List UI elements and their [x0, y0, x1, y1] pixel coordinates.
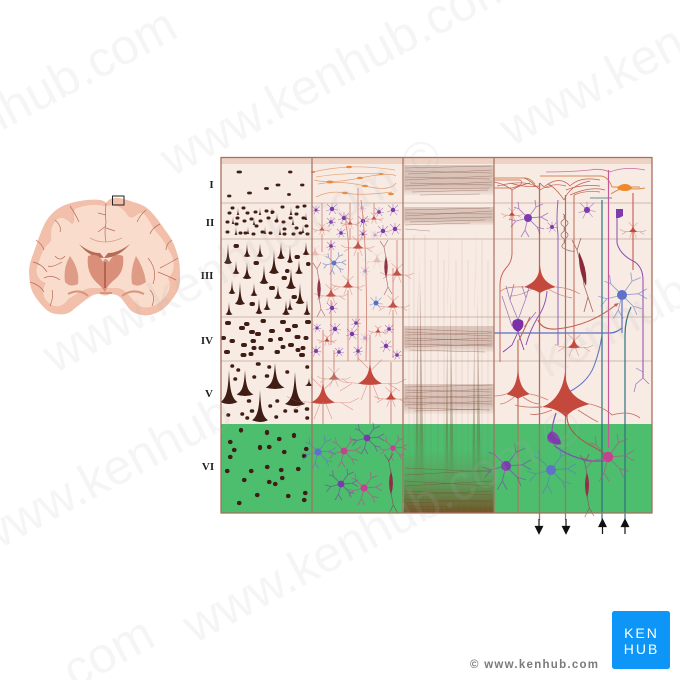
vertical apical and axon lines: [500, 170, 643, 520]
panel: connections column: [482, 168, 649, 534]
purple neuron near right edge: [616, 209, 623, 218]
layer VI neurons: [301, 423, 407, 514]
pink multipolar neuron, layer VI: [583, 434, 634, 482]
multipolar blue neuron, layer VI: [527, 448, 576, 494]
panel: cell bodies (Nissl) column: [220, 172, 313, 503]
efferent arrow 1: [536, 519, 542, 534]
panel: Golgi neuron column: [287, 166, 414, 514]
layer IV granule cells: [223, 321, 309, 355]
efferent arrow 2: [562, 519, 570, 534]
horizontal fibre bands: [405, 166, 492, 510]
layer label IV: IV: [201, 335, 213, 347]
purple curved fibre: [526, 291, 547, 345]
panel: cortex background layers: [221, 157, 652, 513]
horizontal blue fibre: [494, 328, 622, 333]
red curved fibre with arrow: [538, 304, 617, 329]
Kenhub logo: [612, 611, 670, 669]
layer VI connections: [567, 415, 608, 457]
layer I horizontal cells: [311, 166, 396, 197]
copyright text: © www.kenhub.com: [470, 659, 598, 671]
purple pyramidal neuron, layer IV: [502, 284, 536, 352]
bipolar neuron, layer VI: [580, 454, 594, 517]
afferent arrow 1: [599, 520, 606, 534]
purple multipolar neuron: [509, 200, 548, 237]
red pyramidal neuron, right: [620, 222, 646, 238]
layer IV stellate cells: [311, 318, 402, 360]
layer II–III pyramidal cells: [301, 188, 414, 361]
layer II cell bodies: [227, 206, 308, 234]
multipolar purple neuron, layer VI: [482, 444, 531, 490]
orange horizontal cell: [611, 188, 645, 194]
large red pyramidal neuron, layer III: [500, 265, 580, 298]
panel: myelinated fibre column: [404, 165, 494, 513]
layer IV–V pyramidal cells: [287, 325, 408, 424]
layer label I: I: [209, 179, 214, 191]
layer III interneurons: [313, 240, 392, 317]
red pyramidal neuron, layer IV: [555, 334, 593, 356]
layer V pyramidal cells: [220, 363, 313, 422]
blue curved fibre: [569, 335, 602, 392]
layer label VI: VI: [202, 461, 214, 473]
layer I tangential fibres: [494, 168, 645, 200]
fibre density tone: [404, 165, 494, 513]
large pyramidal neuron, layer V: [515, 372, 640, 422]
dendrites right: [634, 368, 649, 392]
layer label III: III: [201, 270, 213, 282]
layer III pyramidal cells: [224, 242, 310, 315]
layer III bipolar neuron: [572, 238, 593, 312]
watermark: www.kenhub.com ©: [173, 396, 591, 654]
Kenhub logo: KEN: [624, 625, 659, 641]
brain coronal section: [29, 198, 180, 315]
afferent arrow 2: [622, 520, 628, 534]
purple neuron, layer VI: [547, 431, 561, 445]
purple stellate neuron, layer II: [579, 202, 595, 218]
layer I cell bodies: [228, 172, 303, 196]
vertical fibre bundles: [415, 225, 481, 490]
small red pyramidal neuron: [501, 208, 523, 220]
spiral axon: [561, 214, 575, 251]
pyramidal neuron, layer V left: [494, 368, 548, 404]
Kenhub logo: HUB: [624, 641, 659, 657]
panel frame and column dividers: [221, 158, 652, 513]
blue multipolar neuron: [598, 272, 647, 319]
layer VI polymorphic cells: [227, 430, 306, 503]
watermark: www.kenhub.com ©: [33, 126, 451, 384]
layer II stellate cells: [312, 203, 401, 239]
purple bipolar neuron: [547, 222, 557, 232]
layer label V: V: [205, 388, 213, 400]
locator rectangle on brain: [112, 196, 124, 205]
layer label II: II: [206, 217, 214, 229]
